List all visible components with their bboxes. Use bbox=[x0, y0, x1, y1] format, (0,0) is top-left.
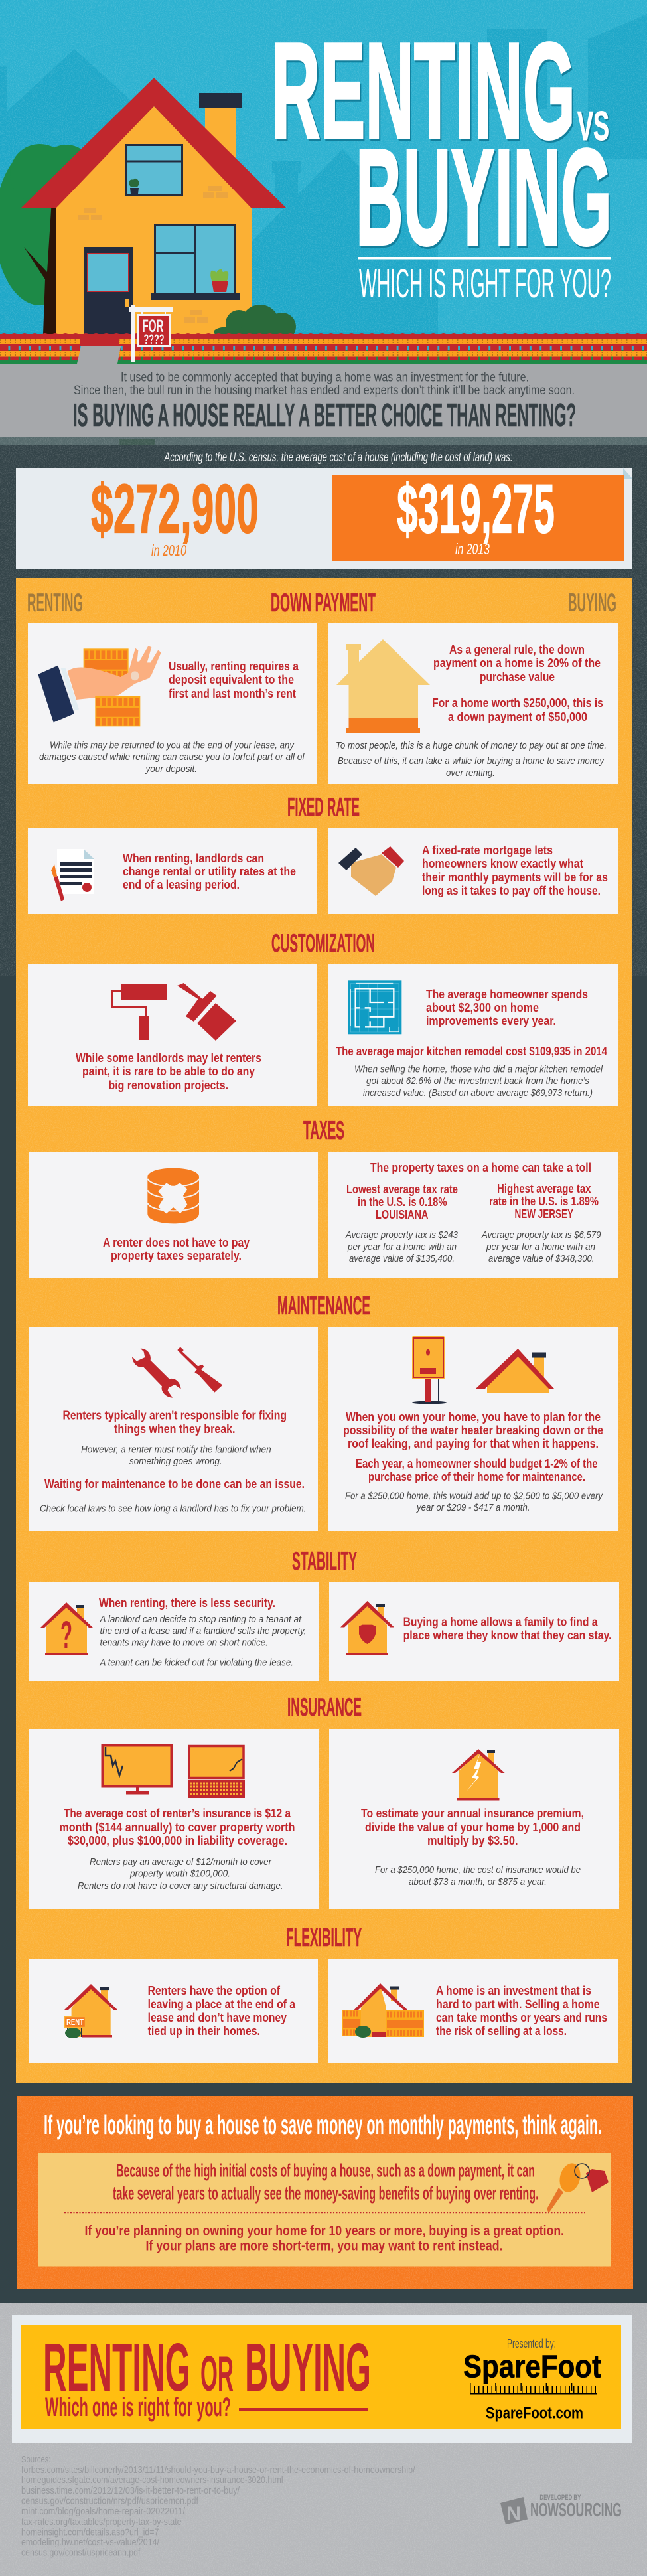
banner: presented by bbox=[12, 2315, 632, 2443]
key message: purchase value bbox=[480, 670, 555, 684]
panel: yellow comparison area: CUSTOMIZATION bbox=[271, 929, 375, 958]
advice bbox=[85, 2224, 564, 2253]
detail: got about 62.6% of the investment back from the home’s bbox=[366, 1075, 589, 1087]
icon: wrench and screwdriver bbox=[132, 1347, 222, 1398]
sources list: business.time.com/2012/12/03/is-it-better-to-rent-or-to-buy/ bbox=[21, 2485, 240, 2496]
lowest tax rate: Average property tax is $243 bbox=[345, 1229, 459, 1241]
card: buying customization bbox=[328, 964, 618, 1106]
upper window bbox=[125, 145, 182, 195]
intro text: It used to be commonly accepted that buying a home was an investment for the future. bbox=[121, 370, 529, 385]
message: However, a renter must notify the landlord when bbox=[81, 1444, 271, 1456]
icon: broken monitor bbox=[102, 1746, 171, 1795]
message: the end of a lease and if a landlord sells the property, bbox=[100, 1626, 307, 1637]
message bbox=[148, 1984, 296, 2038]
lowest tax rate: in the U.S. is 0.18% bbox=[358, 1195, 447, 1209]
detail: While this may be returned to you at the end of your lease, any bbox=[50, 739, 295, 751]
message: homeowners know exactly what bbox=[422, 857, 583, 870]
lowest tax rate: average value of $135,400. bbox=[349, 1253, 455, 1264]
highest tax rate: per year for a home with an bbox=[486, 1241, 595, 1252]
banner title: Which one is right for you? bbox=[45, 2393, 231, 2422]
sources list bbox=[21, 2454, 415, 2559]
icon: tax barrel bbox=[147, 1168, 199, 1223]
card: renting stability bbox=[29, 1582, 319, 1681]
title shadow: VS bbox=[579, 105, 611, 151]
message: A fixed-rate mortgage lets bbox=[422, 844, 553, 857]
highest tax rate: rate in the U.S. is 1.89% bbox=[489, 1195, 599, 1208]
title words: VS bbox=[577, 104, 609, 149]
panel: yellow comparison area: FIXED RATE bbox=[287, 793, 360, 822]
message bbox=[60, 1807, 295, 1892]
message bbox=[76, 1051, 261, 1092]
message: $30,000, plus $100,000 in liability coverage. bbox=[68, 1834, 287, 1847]
logo: nowsourcing: N bbox=[506, 2503, 521, 2525]
message: A renter does not have to pay bbox=[103, 1236, 250, 1249]
message: things when they break. bbox=[114, 1422, 235, 1436]
door bbox=[84, 247, 133, 334]
message: A tenant can be kicked out for violating the lease. bbox=[100, 1657, 293, 1669]
detail: When selling the home, those who did a major kitchen remodel bbox=[354, 1064, 603, 1075]
sponsor bbox=[463, 2337, 601, 2423]
message bbox=[103, 1236, 250, 1262]
highest tax rate: Highest average tax bbox=[497, 1182, 591, 1195]
message: paint, it is rare to be able to do any bbox=[82, 1065, 255, 1078]
card: renting maintenance bbox=[29, 1327, 318, 1531]
stat: 2010 price: $272,900 bbox=[91, 470, 259, 548]
stat: 2010 price bbox=[91, 470, 259, 559]
detail: Because of this, it can take a while for buying a home to save money bbox=[338, 755, 605, 767]
panel: yellow comparison area bbox=[16, 578, 632, 2083]
dark background bbox=[0, 437, 647, 976]
icon: house key bbox=[547, 2161, 609, 2213]
stat: 2013 price bbox=[332, 470, 624, 561]
message: possibility of the water heater breaking down or the bbox=[343, 1424, 603, 1437]
card: buying stability bbox=[329, 1582, 619, 1681]
logo: nowsourcing: DEVELOPED BY bbox=[539, 2494, 581, 2502]
message: leaving a place at the end of a bbox=[148, 1998, 296, 2011]
stat: 2013 price: in 2013 bbox=[455, 540, 490, 558]
icon: handshake bbox=[338, 846, 404, 896]
lower window bbox=[151, 224, 240, 300]
panel: yellow comparison area: RENTING bbox=[27, 589, 83, 617]
message: When renting, landlords can bbox=[123, 852, 264, 865]
message: their monthly payments will be for as bbox=[422, 871, 608, 884]
message: multiply by $3.50. bbox=[427, 1834, 518, 1847]
message: Renters do not have to cover any structural damage. bbox=[78, 1880, 283, 1892]
chimney bbox=[199, 93, 242, 166]
detail: increased value. (Based on above average $69,973 return.) bbox=[363, 1087, 593, 1099]
detail: damages caused while renting can cause you to forfeit part or all of bbox=[39, 751, 306, 763]
message bbox=[422, 844, 608, 897]
panel: yellow comparison area: STABILITY bbox=[292, 1547, 357, 1576]
message: the risk of selling at a loss. bbox=[436, 2024, 567, 2038]
card: renting fixed rate bbox=[28, 828, 317, 914]
message: Renters typically aren't responsible for fixing bbox=[62, 1409, 287, 1422]
key message bbox=[432, 643, 603, 723]
icon: blueprint bbox=[348, 980, 401, 1034]
message: While some landlords may let renters bbox=[76, 1051, 261, 1065]
message: A home is an investment that is bbox=[436, 1984, 591, 1997]
icon: hand with money bbox=[38, 646, 161, 726]
message: about $73 a month, or $875 a year. bbox=[409, 1876, 547, 1888]
message: year or $209 - $417 a month. bbox=[416, 1502, 530, 1513]
message: The average cost of renter’s insurance is $12 a bbox=[64, 1807, 291, 1820]
card: buying taxes bbox=[328, 1152, 618, 1278]
message: long as it takes to pay off the house. bbox=[422, 884, 601, 897]
panel: yellow comparison area: DOWN PAYMENT bbox=[271, 589, 376, 617]
icon: house with rent sign bbox=[64, 1984, 117, 2038]
message: The average homeowner spends bbox=[426, 988, 588, 1001]
message: place where they know that they can stay. bbox=[403, 1629, 612, 1642]
panel: yellow comparison area: FLEXIBILITY bbox=[286, 1924, 362, 1952]
logo: nowsourcing bbox=[500, 2494, 622, 2525]
hero: sky with house and title bbox=[0, 0, 647, 364]
sources list: census.gov/construction/nrs/pdf/uspricemon.pdf bbox=[21, 2495, 199, 2506]
message bbox=[336, 988, 607, 1058]
card: renting flexibility bbox=[29, 1959, 318, 2063]
message: For a $250,000 home, the cost of insurance would be bbox=[375, 1864, 581, 1876]
main point bbox=[113, 2160, 539, 2204]
icon: house with question mark: ? bbox=[60, 1614, 72, 1657]
sources list: homeinsight.com/details.asp?url_id=7 bbox=[21, 2526, 159, 2538]
lowest tax rate: Lowest average tax rate bbox=[346, 1183, 458, 1196]
message: Check local laws to see how long a landlord has to fix your problem. bbox=[40, 1503, 306, 1515]
detail bbox=[354, 1064, 603, 1099]
house wall bbox=[56, 106, 252, 334]
tree bbox=[0, 144, 93, 334]
stat: 2010 price: in 2010 bbox=[151, 542, 186, 559]
sources list: census.gov/const/uspriceann.pdf bbox=[21, 2547, 141, 2559]
sponsor: Presented by: bbox=[507, 2337, 556, 2350]
card: renting down payment bbox=[28, 623, 317, 784]
highest tax rate: NEW JERSEY bbox=[515, 1207, 573, 1221]
message bbox=[403, 1616, 612, 1642]
card: buying down payment bbox=[328, 623, 618, 784]
message bbox=[99, 1596, 307, 1669]
for sale sign: FOR bbox=[142, 316, 163, 336]
for sale sign: ???? bbox=[143, 332, 165, 347]
sources list: forbes.com/sites/billconerly/2013/11/11/should-you-buy-a-house-or-rent-the-economics-of-homeownership/ bbox=[21, 2464, 415, 2476]
message bbox=[361, 1807, 584, 1888]
card: renting customization bbox=[28, 964, 317, 1106]
message: property worth $100,000. bbox=[129, 1868, 230, 1880]
icon: house struck by lightning bbox=[452, 1749, 505, 1800]
card: buying flexibility bbox=[328, 1959, 618, 2063]
message bbox=[40, 1409, 306, 1515]
grass bbox=[0, 350, 647, 364]
bush bbox=[214, 305, 304, 343]
title bbox=[271, 15, 613, 306]
key message: For a home worth $250,000, this is bbox=[432, 696, 603, 710]
message: tenants may have to move on short notice. bbox=[100, 1637, 268, 1649]
icon: house with money stacks bbox=[342, 1983, 424, 2038]
icon: broken laptop bbox=[188, 1746, 245, 1798]
sources list: Sources: bbox=[21, 2454, 50, 2465]
key message: deposit equivalent to the bbox=[169, 673, 294, 686]
intro text bbox=[74, 370, 575, 398]
message: big renovation projects. bbox=[109, 1079, 228, 1092]
footer background bbox=[0, 2303, 647, 2576]
title shadow bbox=[273, 17, 613, 275]
message: divide the value of your home by 1,000 and bbox=[365, 1821, 581, 1834]
card: buying maintenance bbox=[328, 1327, 618, 1531]
title words bbox=[271, 15, 612, 273]
message: purchase price of their home for maintenance. bbox=[368, 1470, 585, 1483]
panel: yellow comparison area: TAXES bbox=[303, 1116, 344, 1145]
for sale sign bbox=[129, 305, 173, 362]
key message: As a general rule, the down bbox=[449, 643, 585, 656]
sponsor: SpareFoot bbox=[463, 2350, 601, 2384]
sources list: emodeling.hw.net/cost-vs-value/2014/ bbox=[21, 2537, 160, 2548]
message: Each year, a homeowner should budget 1-2% of the bbox=[356, 1457, 597, 1470]
card: renting insurance bbox=[29, 1729, 319, 1909]
fence bbox=[0, 332, 647, 360]
bricks bbox=[78, 186, 228, 323]
icon: water heater bbox=[412, 1336, 447, 1404]
roof bbox=[21, 78, 287, 208]
message: When renting, there is less security. bbox=[99, 1596, 275, 1610]
message: A landlord can decide to stop renting to a tenant at bbox=[100, 1614, 302, 1625]
advice: If you’re planning on owning your home for 10 years or more, buying is a great option. bbox=[85, 2224, 564, 2239]
highest tax rate: average value of $348,300. bbox=[488, 1253, 595, 1264]
message: hard to part with. Selling a home bbox=[436, 1997, 600, 2010]
detail: To most people, this is a huge chunk of money to pay out at one time. bbox=[336, 740, 607, 751]
icon: ruler bbox=[470, 2387, 597, 2395]
message bbox=[436, 1984, 607, 2038]
message: When you own your home, you have to plan for the bbox=[346, 1410, 601, 1424]
conclusion box bbox=[38, 2153, 611, 2266]
message: can take months or years and runs bbox=[436, 2011, 607, 2024]
sources list: tax-rates.org/taxtables/property-tax-by-state bbox=[21, 2516, 182, 2528]
highest tax rate: Average property tax is $6,579 bbox=[481, 1229, 601, 1241]
icon: house with rent sign: RENT bbox=[66, 2017, 84, 2027]
message: Renters have the option of bbox=[148, 1984, 281, 1997]
headline: The property taxes on a home can take a toll bbox=[370, 1161, 591, 1174]
house illustration bbox=[0, 78, 647, 364]
detail: over renting. bbox=[446, 767, 495, 779]
detail bbox=[39, 739, 306, 775]
icon: house with leaking roof bbox=[476, 1349, 554, 1393]
message bbox=[123, 852, 296, 891]
message: Renters pay an average of $12/month to cover bbox=[90, 1856, 272, 1868]
highest tax rate bbox=[481, 1182, 601, 1264]
lowest tax rate: LOUISIANA bbox=[376, 1208, 429, 1221]
message: month ($144 annually) to cover property worth bbox=[60, 1821, 295, 1834]
panel: yellow comparison area: MAINTENANCE bbox=[277, 1292, 370, 1320]
intro band bbox=[0, 364, 647, 437]
message bbox=[343, 1410, 603, 1513]
banner title: OR bbox=[200, 2346, 234, 2401]
key message: first and last month’s rent bbox=[169, 687, 296, 700]
message: tied up in their homes. bbox=[148, 2024, 260, 2038]
card: renting taxes bbox=[29, 1152, 318, 1278]
icon: house with question mark bbox=[40, 1602, 94, 1657]
message: To estimate your annual insurance premium, bbox=[361, 1807, 584, 1820]
icon: lease document bbox=[51, 849, 94, 901]
lowest tax rate: per year for a home with an bbox=[347, 1241, 457, 1252]
card: buying fixed rate bbox=[328, 828, 618, 914]
message: lease and don’t have money bbox=[148, 2011, 287, 2024]
message: Waiting for maintenance to be done can be an issue. bbox=[44, 1477, 305, 1491]
key message: a down payment of $50,000 bbox=[448, 710, 587, 723]
panel: yellow comparison area: INSURANCE bbox=[287, 1693, 362, 1722]
sponsor: SpareFoot.com bbox=[486, 2405, 583, 2423]
message: improvements every year. bbox=[426, 1014, 556, 1027]
panel: average house cost bbox=[16, 468, 632, 569]
icon: paint roller and brush bbox=[111, 983, 236, 1041]
message: Buying a home allows a family to find a bbox=[403, 1616, 598, 1629]
sources list: homeguides.sfgate.com/average-cost-homeowners-insurance-3020.html bbox=[21, 2474, 283, 2486]
front path bbox=[77, 346, 121, 364]
message: something goes wrong. bbox=[129, 1456, 222, 1467]
advice: If your plans are more short-term, you may want to rent instead. bbox=[146, 2238, 503, 2253]
icon: house twenty percent bbox=[336, 639, 430, 733]
message: For a $250,000 home, this would add up to $2,500 to $5,000 every bbox=[345, 1491, 603, 1502]
sources list: mint.com/blog/goals/home-repair-02022011/ bbox=[21, 2506, 186, 2517]
detail bbox=[336, 740, 607, 779]
panel: conclusion bbox=[17, 2096, 633, 2289]
background houses silhouette bbox=[0, 14, 647, 334]
message: about $2,300 on home bbox=[426, 1001, 539, 1014]
key message: Usually, renting requires a bbox=[169, 660, 299, 673]
message: property taxes separately. bbox=[111, 1249, 242, 1262]
message: end of a leasing period. bbox=[123, 878, 240, 891]
lowest tax rate bbox=[345, 1183, 459, 1264]
key message: payment on a home is 20% of the bbox=[433, 656, 601, 670]
message: change rental or utility rates at the bbox=[123, 865, 296, 878]
icon: house with shield bbox=[340, 1601, 394, 1655]
card: buying insurance bbox=[329, 1729, 619, 1909]
detail: your deposit. bbox=[145, 763, 197, 775]
message: roof leaking, and paying for that when it happens. bbox=[348, 1437, 599, 1450]
banner: presented by: BUYING bbox=[245, 2329, 371, 2405]
key message bbox=[169, 660, 299, 700]
banner title: RENTING bbox=[43, 2329, 190, 2405]
